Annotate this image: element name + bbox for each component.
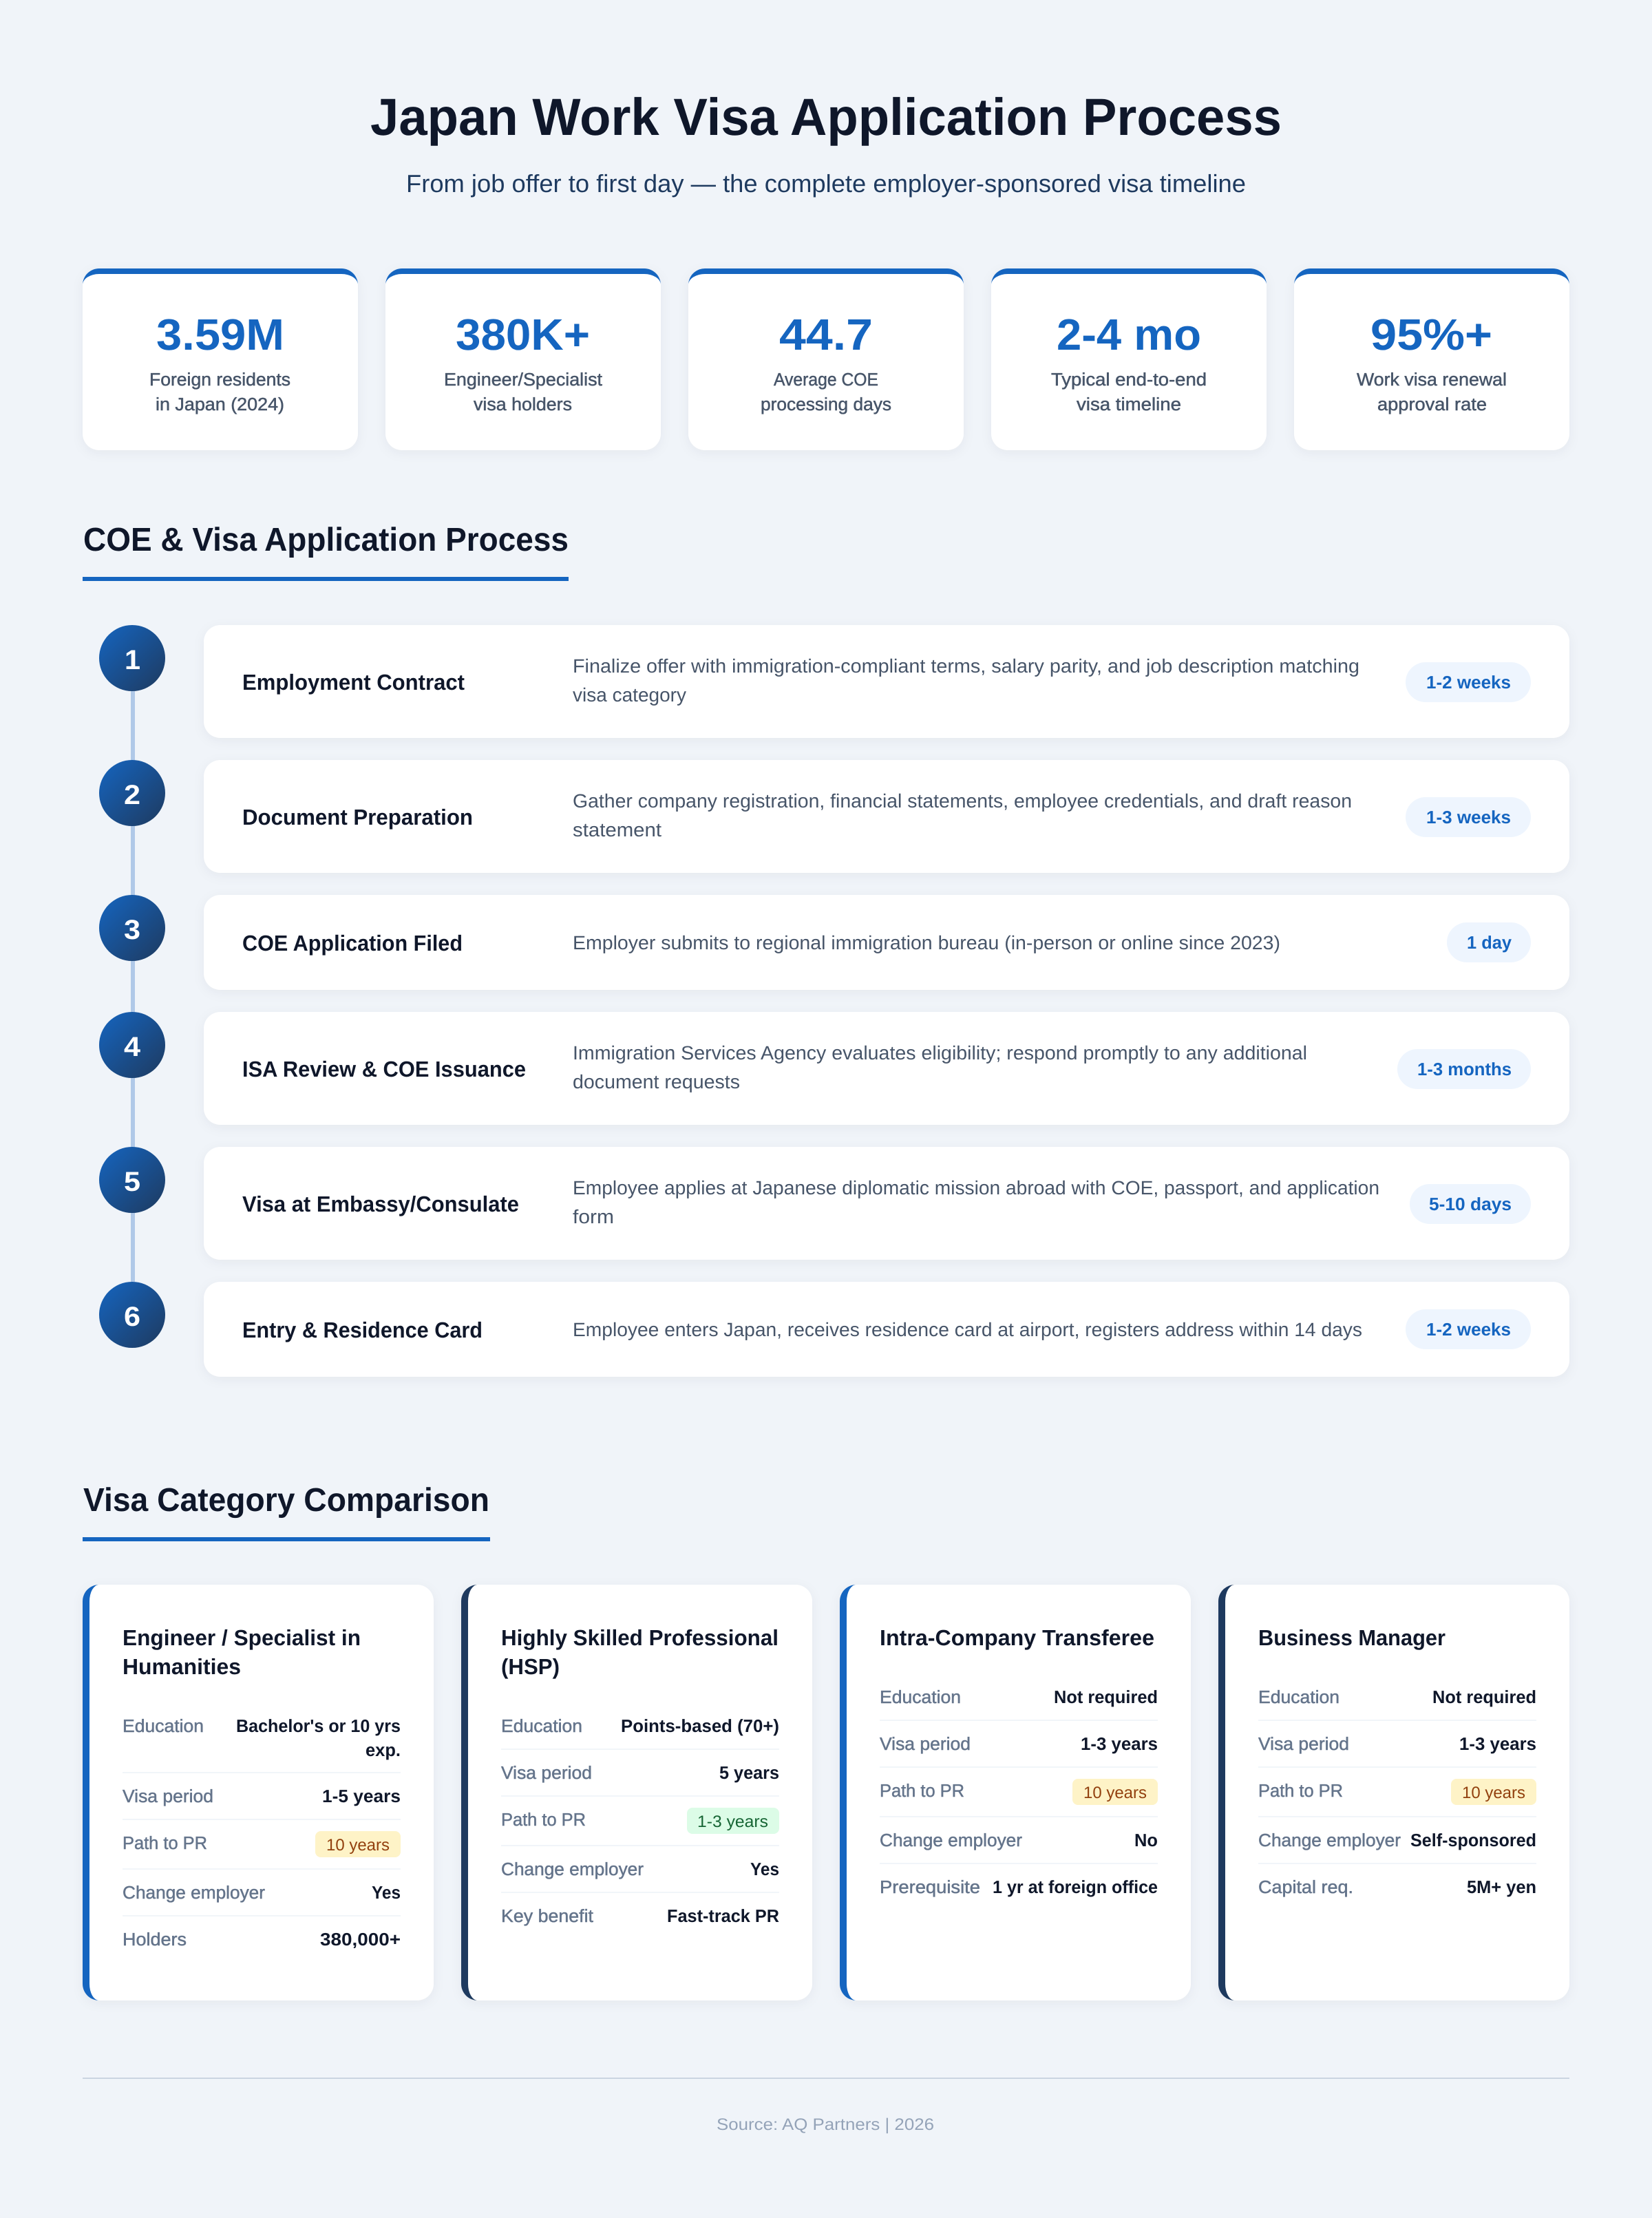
card: Highly Skilled Professional: Change employer [501, 1859, 644, 1879]
step 5: form [573, 1206, 614, 1227]
stat card: visa timeline [991, 268, 1267, 450]
stat card: foreign residents [83, 268, 358, 450]
stat card: renewal approval: 95%+ [1370, 310, 1492, 359]
step 2: 1-3 weeks [1426, 807, 1511, 827]
card: Business Manager [1218, 1585, 1569, 2000]
step 3 [99, 895, 1569, 990]
stat card: engineer specialist holders: visa holders [474, 394, 572, 414]
panel: visa comparison cards [83, 1585, 1569, 2000]
card: Intra-Company Transferee: Path to PR [880, 1780, 964, 1801]
step 5: Employee applies at Japanese diplomatic mission abroad with COE, passport, and application [573, 1177, 1379, 1198]
card: Highly Skilled Professional: Key benefit [501, 1905, 594, 1926]
card: Intra-Company Transferee: 1-3 years [1081, 1733, 1158, 1754]
heading: comparison section: Visa Category Comparison [83, 1482, 489, 1519]
card: Intra-Company Transferee: Visa period [880, 1733, 971, 1754]
stat card: engineer specialist holders: Engineer/Specialist [444, 369, 603, 390]
card: Highly Skilled Professional: Visa period [501, 1762, 592, 1783]
card: Engineer / Specialist in Humanities: 10 years [326, 1836, 390, 1855]
stat card: renewal approval [1294, 268, 1569, 450]
card: Highly Skilled Professional: Yes [750, 1859, 779, 1879]
card: Intra-Company Transferee [840, 1585, 1191, 2000]
step 4: ISA Review & COE Issuance [242, 1057, 526, 1081]
step 6: Entry & Residence Card [242, 1318, 483, 1342]
card: Business Manager: Capital req. [1258, 1877, 1353, 1897]
step 5: 5-10 days [1429, 1194, 1512, 1214]
stat card: COE processing days: Average COE [774, 369, 878, 390]
heading: process section [83, 522, 569, 581]
stat card: COE processing days: 44.7 [779, 310, 873, 359]
card: Engineer / Specialist in Humanities: Engineer / Specialist in [123, 1625, 361, 1650]
card: Business Manager: 10 years [1462, 1784, 1525, 1802]
card: Highly Skilled Professional: Highly Skilled Professional [501, 1625, 779, 1650]
step 1: 1 [125, 645, 140, 675]
step 2: 2 [124, 780, 140, 810]
step 6 [99, 1282, 1569, 1377]
card: Intra-Company Transferee: Not required [1054, 1687, 1158, 1707]
card: Business Manager: Not required [1432, 1687, 1536, 1707]
card: Intra-Company Transferee: 10 years [1083, 1784, 1147, 1802]
step 4: 4 [124, 1032, 141, 1062]
card: Intra-Company Transferee: No [1134, 1830, 1158, 1850]
card: Engineer / Specialist in Humanities [83, 1585, 434, 2000]
step 3: Employer submits to regional immigration bureau (in-person or online since 2023) [573, 932, 1280, 953]
step 1: Employment Contract [242, 670, 465, 695]
panel: process timeline [99, 625, 1569, 1377]
card: Business Manager: Change employer [1258, 1830, 1401, 1850]
step 3: 3 [124, 915, 140, 945]
card: Highly Skilled Professional: 1-3 years [697, 1813, 768, 1831]
card: Intra-Company Transferee: 1 yr at foreign office [993, 1877, 1158, 1897]
card: Engineer / Specialist in Humanities: Education [123, 1715, 204, 1736]
card: Engineer / Specialist in Humanities: Path to PR [123, 1833, 207, 1853]
card: Engineer / Specialist in Humanities: Change employer [123, 1882, 265, 1903]
stat card: renewal approval: Work visa renewal [1357, 369, 1507, 390]
step 2: Gather company registration, financial statements, employee credentials, and draft reason [573, 790, 1352, 812]
card: Highly Skilled Professional: Path to PR [501, 1809, 586, 1830]
step 6: Employee enters Japan, receives residence card at airport, registers address within 14 days [573, 1319, 1362, 1340]
card: Highly Skilled Professional [461, 1585, 812, 2000]
step 4: 1-3 months [1417, 1059, 1512, 1079]
step 1: Finalize offer with immigration-compliant terms, salary parity, and job description matching [573, 655, 1359, 677]
step 4: document requests [573, 1071, 740, 1092]
card: Business Manager: Visa period [1258, 1733, 1349, 1754]
stat card: visa timeline: Typical end-to-end [1051, 369, 1207, 390]
stat card: engineer specialist holders [385, 268, 661, 450]
stat card: visa timeline: 2-4 mo [1057, 310, 1201, 359]
card: Business Manager: 5M+ yen [1467, 1877, 1536, 1897]
step 5: 5 [124, 1167, 140, 1197]
card: Engineer / Specialist in Humanities: 1-5 years [322, 1786, 401, 1806]
step 6: 1-2 weeks [1426, 1319, 1511, 1340]
card: Highly Skilled Professional: Education [501, 1715, 582, 1736]
card: Business Manager: Self-sponsored [1410, 1830, 1536, 1850]
step 4 [99, 1012, 1569, 1125]
title: Japan Work Visa Application Process [370, 88, 1282, 147]
card: Business Manager: Business Manager [1258, 1625, 1446, 1650]
card: Highly Skilled Professional: (HSP) [501, 1654, 560, 1679]
footer source: Source: AQ Partners | 2026 [717, 2115, 934, 2134]
step 5 [99, 1147, 1569, 1260]
step 1 [99, 625, 1569, 738]
step 2: statement [573, 819, 661, 841]
stat card: foreign residents: in Japan (2024) [156, 394, 284, 414]
card: Business Manager: Path to PR [1258, 1780, 1343, 1801]
heading: comparison section [83, 1482, 490, 1541]
step 2 [99, 760, 1569, 873]
card: Engineer / Specialist in Humanities: Holders [123, 1929, 187, 1950]
stat card: visa timeline: visa timeline [1077, 394, 1181, 414]
connector line [131, 691, 135, 1282]
step 2: Document Preparation [242, 805, 473, 830]
subtitle: From job offer to first day — the complete employer-sponsored visa timeline [406, 169, 1246, 198]
stat card: COE processing days: processing days [761, 394, 891, 414]
step 3: COE Application Filed [242, 931, 463, 955]
step 4: Immigration Services Agency evaluates eligibility; respond promptly to any additional [573, 1042, 1307, 1064]
step 6: 6 [124, 1302, 140, 1332]
stat card: engineer specialist holders: 380K+ [456, 310, 590, 359]
card: Engineer / Specialist in Humanities: Bachelor's or 10 yrs [236, 1715, 401, 1736]
card: Engineer / Specialist in Humanities: Visa period [123, 1786, 213, 1806]
card: Intra-Company Transferee: Prerequisite [880, 1877, 980, 1897]
card: Engineer / Specialist in Humanities: Humanities [123, 1654, 241, 1679]
card: Intra-Company Transferee: Education [880, 1687, 961, 1707]
card: Engineer / Specialist in Humanities: exp. [366, 1740, 401, 1760]
stat card: foreign residents: 3.59M [156, 310, 284, 359]
stat card: COE processing days [688, 268, 964, 450]
card: Intra-Company Transferee: Intra-Company Transferee [880, 1625, 1154, 1650]
card: Highly Skilled Professional: 5 years [719, 1762, 779, 1783]
card: Engineer / Specialist in Humanities: Yes [372, 1882, 401, 1903]
panel: key statistics [83, 268, 1569, 450]
card: Business Manager: 1-3 years [1459, 1733, 1536, 1754]
card: Intra-Company Transferee: Change employer [880, 1830, 1022, 1850]
card: Highly Skilled Professional: Fast-track PR [667, 1905, 779, 1926]
stat card: foreign residents: Foreign residents [149, 369, 290, 390]
card: Highly Skilled Professional: Points-based (70+) [621, 1715, 779, 1736]
card: Engineer / Specialist in Humanities: 380,000+ [320, 1929, 401, 1950]
step 1: 1-2 weeks [1426, 672, 1511, 693]
stat card: renewal approval: approval rate [1377, 394, 1487, 414]
step 3: 1 day [1467, 932, 1512, 953]
step 5: Visa at Embassy/Consulate [242, 1192, 519, 1216]
step 1: visa category [573, 684, 686, 706]
heading: process section: COE & Visa Application Process [83, 522, 569, 558]
card: Business Manager: Education [1258, 1687, 1339, 1707]
